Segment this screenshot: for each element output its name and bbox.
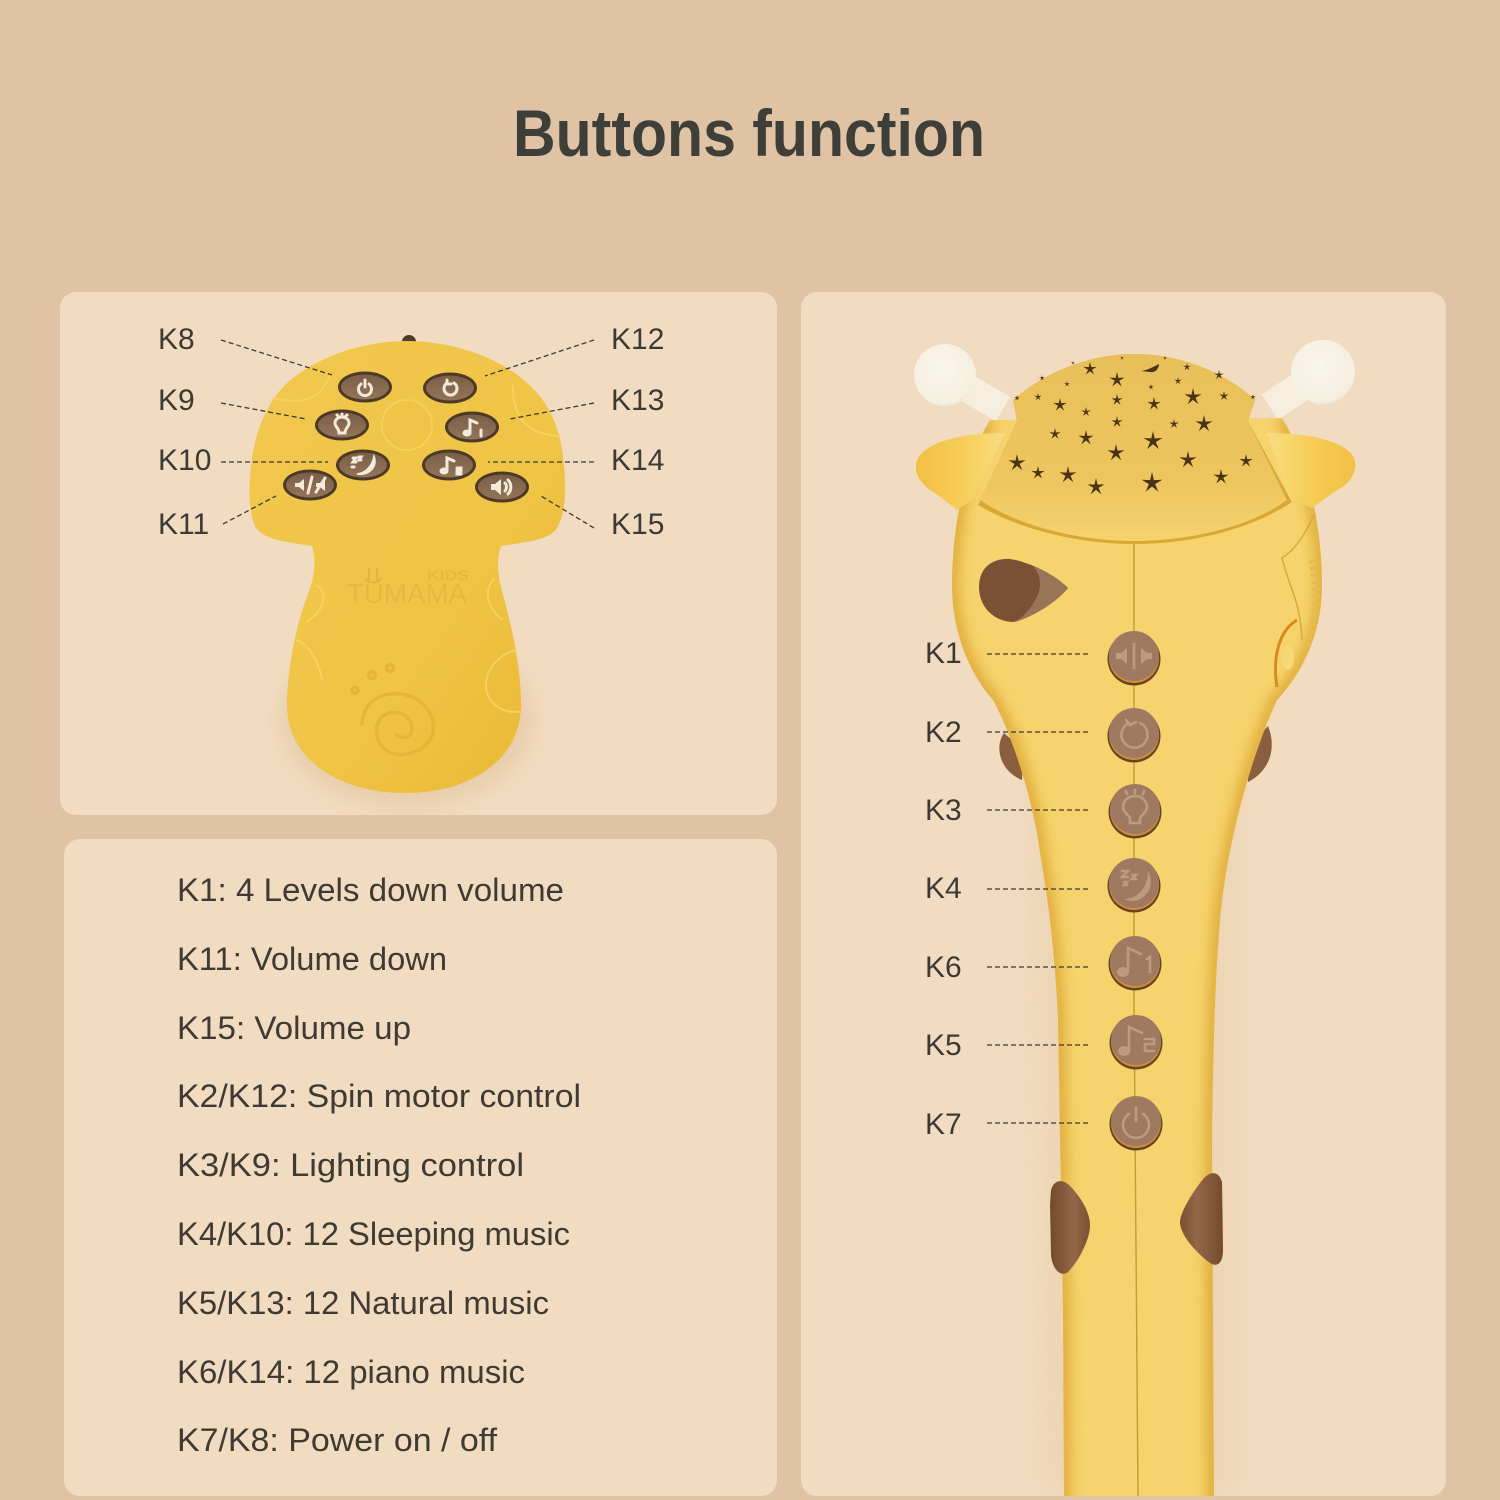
title: Buttons function (513, 96, 985, 170)
remote shadow (282, 635, 532, 805)
star dome (978, 354, 1292, 544)
list item K6/K14: K6/K14: 12 piano music (177, 1354, 525, 1390)
side seam and logo detail (1276, 515, 1315, 687)
label K10: K10 (158, 444, 211, 477)
label K7: K7 (925, 1108, 962, 1141)
panel: giraffe device (801, 292, 1446, 1500)
button K10 (336, 450, 390, 480)
list item K5/K13: K5/K13: 12 Natural music (177, 1285, 549, 1321)
antennae (914, 340, 1355, 409)
label K14: K14 (611, 444, 664, 477)
button K15 (475, 472, 529, 502)
list item K2/K12: K2/K12: Spin motor control (177, 1078, 581, 1114)
button K13 (445, 412, 499, 442)
list item K11: K11: Volume down (177, 941, 447, 977)
remote logo: TUMAMA (347, 578, 467, 609)
label K13 (510, 384, 664, 419)
button K7 (1110, 1096, 1162, 1150)
button K5 (1110, 1015, 1162, 1070)
button K14 (422, 450, 476, 480)
button K2 (1108, 708, 1160, 762)
rear brown bumps (999, 726, 1272, 782)
button K12 (423, 372, 477, 404)
label K3: K3 (925, 794, 962, 827)
lower brown bumps (1050, 1173, 1223, 1274)
label K1: K1 (925, 637, 962, 670)
label K9: K9 (158, 384, 195, 417)
panel: function list (64, 839, 777, 1496)
button K6 (1108, 936, 1162, 990)
remote logo bunny (365, 568, 381, 582)
ears (916, 433, 1355, 510)
label K12: K12 (611, 323, 664, 356)
panel: remote control (60, 292, 777, 815)
list item K7/K8: K7/K8: Power on / off (177, 1422, 497, 1458)
label K5: K5 (925, 1029, 962, 1062)
label K2: K2 (925, 716, 962, 749)
label K15: K15 (611, 508, 664, 541)
label K11: K11 (158, 508, 209, 541)
center seam (1134, 543, 1138, 1496)
label K13: K13 (611, 384, 664, 417)
label K9 (158, 384, 306, 419)
button K8 (338, 372, 392, 402)
neck shadow (1030, 700, 1240, 1496)
remote logo kids: KIDS (427, 567, 469, 583)
label K4: K4 (925, 872, 962, 905)
brown eye (979, 559, 1068, 622)
label K12 (485, 323, 664, 376)
list item K3/K9: K3/K9: Lighting control (177, 1147, 524, 1183)
label K6: K6 (925, 951, 962, 984)
button K9 (315, 410, 369, 440)
label K15 (541, 496, 664, 541)
label K11 (158, 496, 276, 541)
button K11 (283, 470, 337, 500)
remote: mushroom body (249, 335, 565, 793)
button K3 (1108, 784, 1162, 838)
list item K15: K15: Volume up (177, 1010, 411, 1046)
label K8: K8 (158, 323, 195, 356)
dome star cutouts (1008, 356, 1256, 494)
label K8 (158, 323, 332, 375)
list item K1: K1: 4 Levels down volume (177, 872, 564, 908)
giraffe body and neck (952, 418, 1322, 1500)
button K1 (1108, 631, 1160, 686)
remote spiral emblem (352, 664, 433, 754)
list item K4/K10: K4/K10: 12 Sleeping music (177, 1216, 570, 1252)
button K4 (1108, 858, 1160, 912)
